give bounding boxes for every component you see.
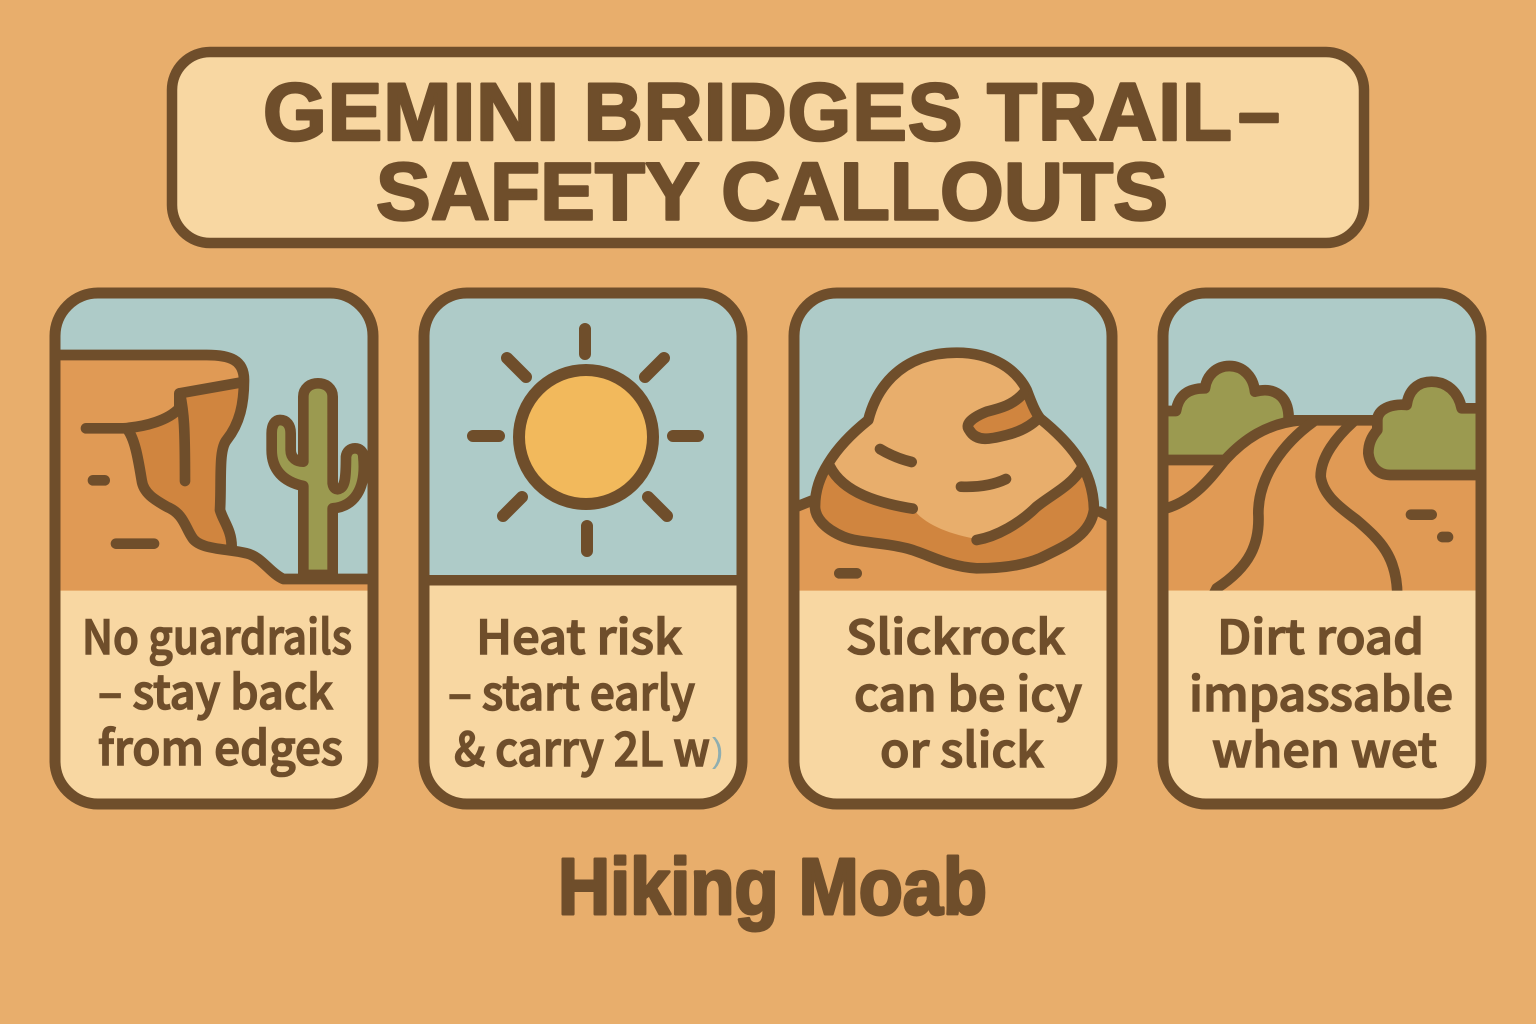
caption: dirt road: Dirt road bbox=[1217, 599, 1424, 668]
caption: dirt road: impassable bbox=[1189, 656, 1453, 725]
caption: slickrock: can be icy bbox=[854, 656, 1082, 725]
caption: dirt road: when wet bbox=[1212, 712, 1437, 781]
panel: slickrock bbox=[780, 293, 1120, 804]
illustration: cliff and cactus bbox=[60, 350, 368, 591]
caption: no guardrails bbox=[82, 599, 352, 779]
illustration: slickrock dome bbox=[780, 353, 1120, 591]
caption: heat risk bbox=[448, 599, 723, 780]
caption: no guardrails: from edges bbox=[98, 710, 343, 779]
caption: heat risk: – start early bbox=[448, 655, 695, 724]
illustration: dirt road and bushes bbox=[1168, 360, 1476, 591]
caption: no guardrails: No guardrails bbox=[82, 599, 352, 668]
title banner: SAFETY CALLOUTS bbox=[376, 146, 1168, 238]
panel: dirt road bbox=[1150, 293, 1500, 804]
caption: heat risk: & carry 2L w bbox=[454, 711, 710, 780]
caption: heat risk: Heat risk bbox=[476, 599, 682, 668]
caption: dirt road bbox=[1189, 599, 1453, 781]
footer: Hiking Moab: Hiking Moab bbox=[558, 842, 987, 931]
caption: slickrock: Slickrock bbox=[846, 599, 1065, 668]
title banner bbox=[172, 52, 1364, 243]
panel: no guardrails bbox=[40, 293, 390, 804]
title banner: – bbox=[1238, 67, 1280, 158]
caption: slickrock: or slick bbox=[880, 712, 1044, 781]
title banner: GEMINI BRIDGES TRAIL bbox=[263, 67, 1232, 158]
icon: sun bbox=[473, 329, 698, 551]
caption: heat risk: ) bbox=[712, 732, 723, 770]
caption: no guardrails: – stay back bbox=[98, 654, 333, 723]
panel: heat risk bbox=[424, 293, 742, 804]
caption: slickrock bbox=[846, 599, 1082, 781]
